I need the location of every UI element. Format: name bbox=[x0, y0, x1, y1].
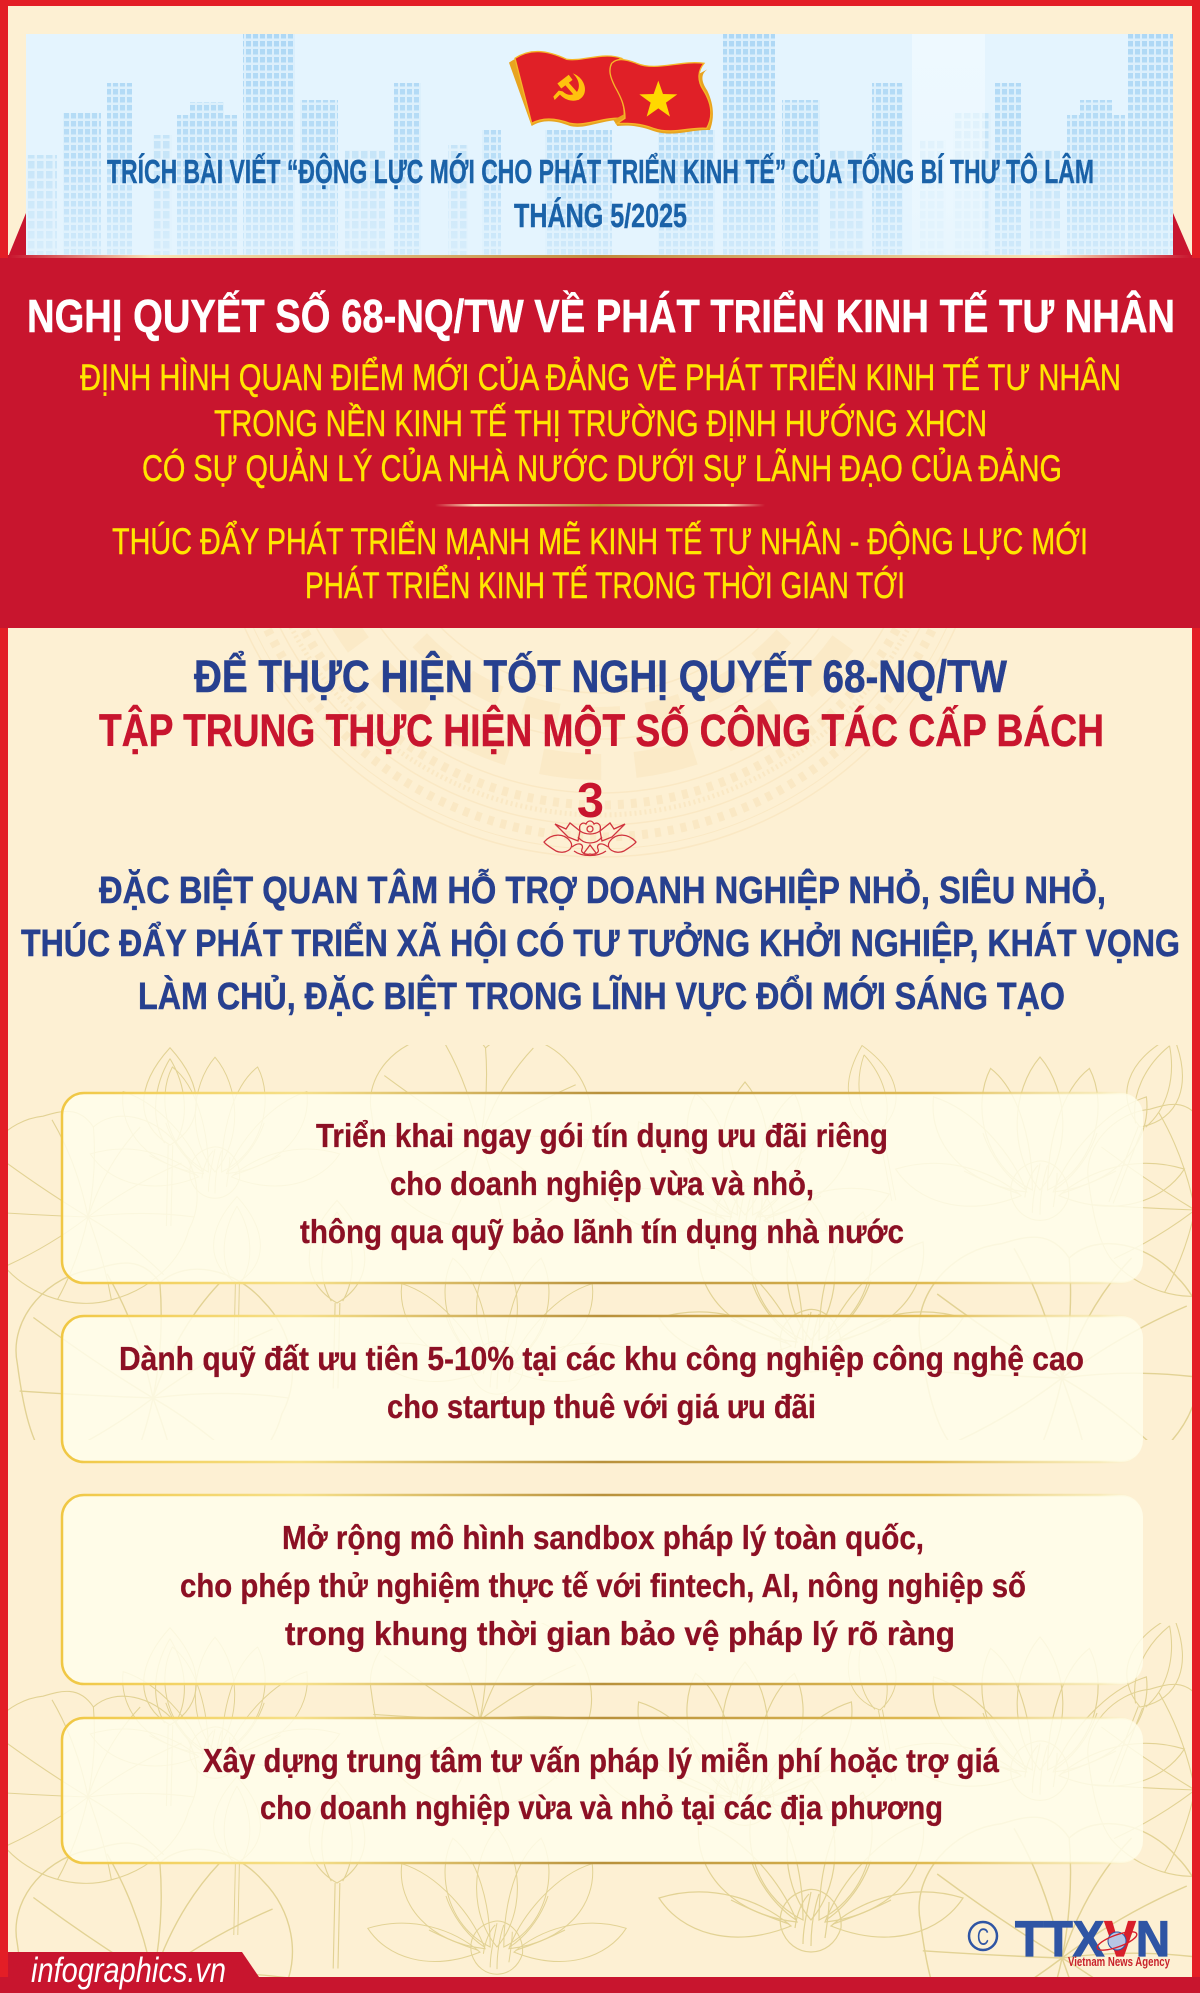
band divider bbox=[435, 504, 765, 506]
website tab bbox=[8, 1952, 259, 1980]
panel: legal advice centre card bbox=[62, 1718, 1143, 1863]
icon: red lotus ornament bbox=[544, 821, 636, 856]
agency wordmark: TTXVN bbox=[1015, 1911, 1170, 1967]
card text: Xây dựng trung tâm tư vấn pháp lý miễn phí hoặc trợ giá bbox=[203, 1742, 1000, 1779]
icon: copyright bbox=[969, 1922, 997, 1951]
panel: legal sandbox card bbox=[62, 1495, 1143, 1684]
card text bbox=[203, 1742, 1000, 1826]
band text block 2 bbox=[112, 520, 1088, 606]
bronze drum watermark bbox=[244, 628, 956, 858]
heading: support for small businesses bbox=[21, 867, 1180, 1018]
card text bbox=[180, 1519, 1026, 1652]
card text: Mở rộng mô hình sandbox pháp lý toàn quốc, bbox=[282, 1519, 924, 1556]
banner date: THÁNG 5/2025 bbox=[514, 197, 687, 234]
card text: cho doanh nghiệp vừa và nhỏ, bbox=[390, 1165, 814, 1202]
header banner with skyline bbox=[8, 34, 1192, 259]
red band background bbox=[0, 258, 1200, 628]
gold rule under banner bbox=[8, 255, 1192, 259]
heading: implementing resolution 68 bbox=[99, 651, 1104, 756]
heading: implementing resolution 68: ĐỂ THỰC HIỆN TỐT NGHỊ QUYẾT 68-NQ/TW bbox=[194, 651, 1007, 702]
logo: TTXVN copyright mark bbox=[969, 1911, 1171, 1969]
banner sky bbox=[26, 34, 1173, 257]
panel: land fund card bbox=[62, 1316, 1143, 1462]
band text block 2: PHÁT TRIỂN KINH TẾ TRONG THỜI GIAN TỚI bbox=[305, 564, 905, 606]
card text: trong khung thời gian bảo vệ pháp lý rõ ràng bbox=[285, 1615, 955, 1652]
card text: cho doanh nghiệp vừa và nhỏ tại các địa phương bbox=[260, 1789, 943, 1826]
card text: thông qua quỹ bảo lãnh tín dụng nhà nước bbox=[300, 1213, 904, 1250]
panel: credit package card bbox=[62, 1093, 1143, 1283]
icon: globe bbox=[1095, 1928, 1139, 1954]
panel: red resolution band bbox=[0, 258, 1200, 628]
lotus line-art background bbox=[0, 1027, 1200, 1993]
skyline bbox=[26, 34, 1173, 257]
website label: infographics.vn bbox=[31, 1951, 226, 1990]
band text block 1 bbox=[80, 356, 1121, 489]
heading: support for small businesses: LÀM CHỦ, ĐẶC BIỆT TRONG LĨNH VỰC ĐỔI MỚI SÁNG TẠO bbox=[138, 973, 1065, 1018]
band text block 1: TRONG NỀN KINH TẾ THỊ TRƯỜNG ĐỊNH HƯỚNG XHCN bbox=[214, 403, 987, 444]
card text: Triển khai ngay gói tín dụng ưu đãi riêng bbox=[316, 1117, 888, 1154]
icon: party and national flags bbox=[509, 52, 713, 134]
side ribbon folds bbox=[8, 213, 26, 257]
card text bbox=[119, 1340, 1084, 1425]
card text bbox=[300, 1117, 904, 1250]
number 3: 3 bbox=[577, 774, 604, 828]
card text: cho startup thuê với giá ưu đãi bbox=[387, 1388, 816, 1425]
card text: Dành quỹ đất ưu tiên 5-10% tại các khu công nghiệp công nghệ cao bbox=[119, 1340, 1084, 1377]
icon: copyright: C bbox=[977, 1924, 989, 1951]
card text: cho phép thử nghiệm thực tế với fintech, AI, nông nghiệp số bbox=[180, 1567, 1026, 1604]
footer strip bbox=[0, 1951, 1200, 1993]
